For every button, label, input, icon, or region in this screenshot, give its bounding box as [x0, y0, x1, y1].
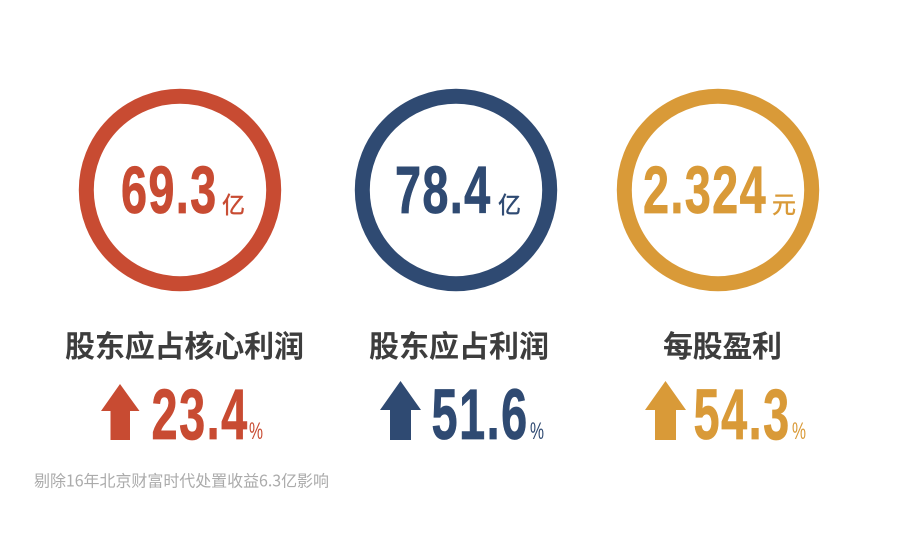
unit: 元: [772, 192, 796, 219]
panel: earnings per share: [624, 96, 812, 454]
panel: core profit: [65, 96, 304, 454]
red ring with value: [86, 96, 274, 284]
percent sign: %: [249, 418, 263, 445]
panel: attributable profit: [362, 96, 550, 454]
up arrow: [380, 381, 421, 440]
value 69.3: 69.3: [121, 154, 218, 228]
up arrow: [645, 381, 686, 440]
value 2.324: 2.324: [643, 154, 767, 228]
growth value: 54.3: [694, 375, 791, 454]
percent sign: %: [792, 418, 806, 445]
growth figure: [152, 375, 263, 454]
percent sign: %: [530, 418, 544, 445]
growth value: 23.4: [152, 375, 249, 454]
gold ring with value: [624, 96, 812, 284]
unit: 亿: [222, 192, 245, 218]
footnote: 剔除16年北京财富时代处置收益6.3亿影响: [34, 468, 329, 492]
ring: [624, 96, 812, 284]
heading: 每股盈利: [663, 331, 782, 364]
heading: 股东应占核心利润: [65, 331, 304, 364]
value 78.4: 78.4: [395, 154, 492, 228]
growth figure: [694, 375, 806, 454]
heading: 股东应占利润: [369, 331, 549, 364]
growth figure: [432, 375, 544, 454]
up arrow: [101, 384, 140, 440]
unit: 亿: [498, 192, 521, 218]
ring: [86, 96, 274, 284]
growth value: 51.6: [432, 375, 529, 454]
blue ring with value: [362, 96, 550, 284]
ring: [362, 96, 550, 284]
